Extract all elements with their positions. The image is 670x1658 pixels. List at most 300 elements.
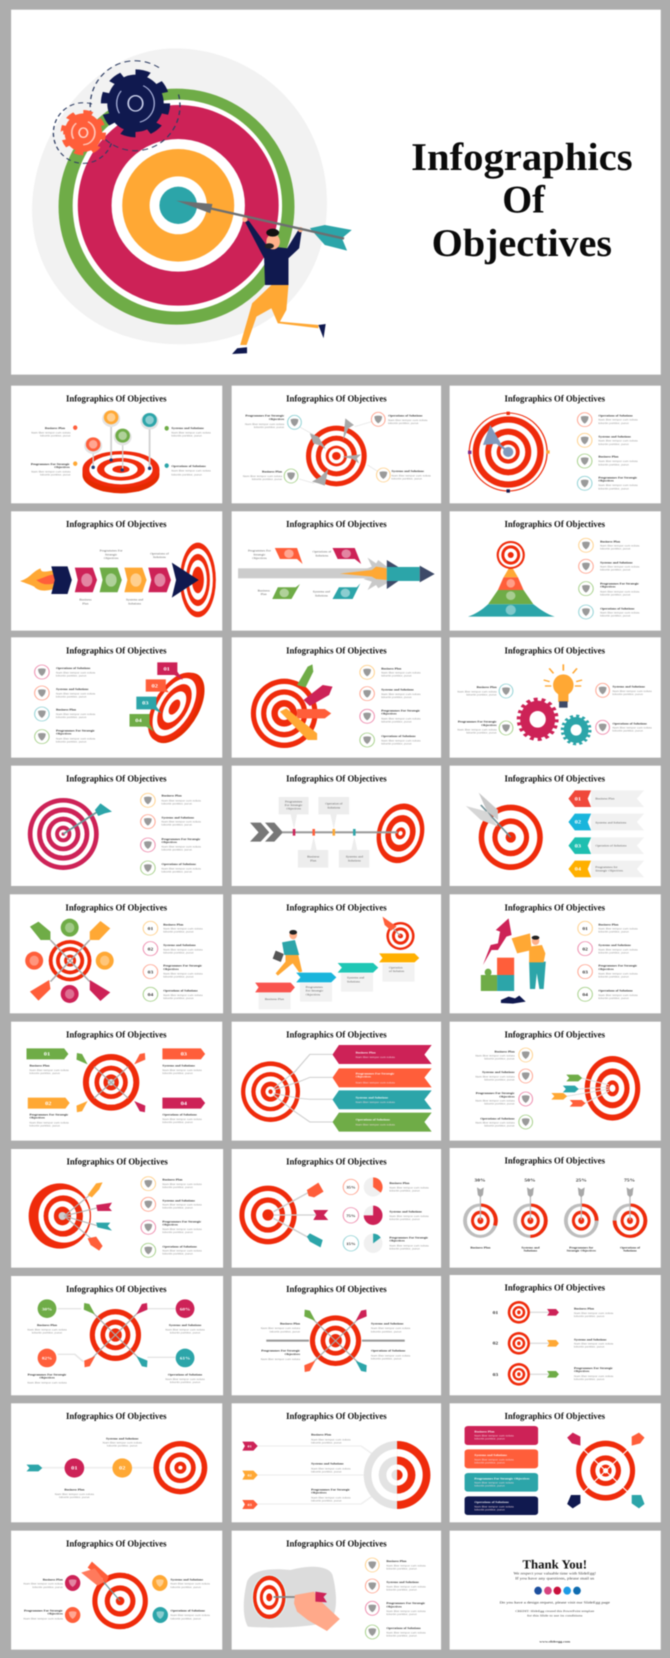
item: Operations: Nam liber tempor cum soluta [171,469,211,472]
item 04: lobortis porttitor, purus [598,997,629,1000]
arrow 02 [242,1462,350,1480]
item: Systems: lobortis porttitor, purus [484,1078,515,1081]
item: Systems: Systems and Solutions [598,435,631,438]
tag: Operations [312,548,361,564]
item: Operations [153,1607,210,1623]
icon: crimson gear [519,699,556,739]
tag: Programmes: Objectives [252,557,267,560]
step 1: Business Plan [265,998,284,1001]
box: Programmes: Nam liber tempor cum soluta [474,1481,514,1484]
ring and pie: 75%: Nam liber tempor cum soluta [389,1215,429,1218]
arrows [567,1433,645,1508]
ring and pie: 35%: lobortis porttitor, purus [389,1189,420,1192]
social icons [534,1587,581,1595]
item: Business [141,1177,202,1191]
item: Programmes: Programmes For Strategic [386,1602,425,1605]
stat: 60%: Nam liber tempor cum soluta [165,1328,205,1331]
panel: slide 8, target with bold arrows: Infographics Of Objectives [286,645,387,656]
thank you message: We respect your valuable time with SlideEgg! [514,1572,596,1576]
item: Systems [596,683,652,697]
gauge: 25%: Strategic Objectives [567,1249,596,1252]
item: Operations: Operations of Solutions [56,667,90,670]
figure: man with briefcase [273,930,302,976]
step 4: of Solution [389,970,404,973]
item: Business: Business Plan [43,1578,63,1581]
cover title [411,135,633,265]
panel: slide 6, pyramid with target: Infographics Of Objectives [505,519,605,529]
ribbon 04: Programmes for [595,866,618,869]
panel: slide 23, target with cross arrows: Infographics Of Objectives [286,1284,387,1294]
ring and pie: 75% [343,1206,429,1225]
item: Operations: Nam liber tempor cum soluta [56,671,95,674]
tag 04: Nam liber tempor cum soluta [162,1118,202,1121]
connectors [58,1309,175,1362]
ring and pie: 35% [343,1177,429,1197]
chevron labels: Objectives [104,557,118,560]
item: Systems [141,815,201,829]
ring and pie: 15%: Programmes For Strategic [389,1236,428,1239]
item: Systems [577,433,638,447]
item: Programmes: Nam liber tempor cum soluta [162,845,201,848]
path line [38,1465,175,1470]
panel: slide 20, target with pie charts [232,1149,441,1268]
item: Business: Nam liber tempor cum soluta [386,1564,426,1567]
item: Operations: Operations of Solutions [171,1609,205,1612]
panel: slide 22, target with percent circles: Infographics Of Objectives [66,1284,167,1294]
gauge: 50%: Systems and [521,1246,540,1249]
item: Systems [165,426,211,437]
item: Business: Business Plan [381,667,402,670]
item: Programmes: Objectives [598,479,614,482]
stat: 61%: Operations of Solutions [168,1373,202,1376]
item: Business: Nam liber tempor cum soluta [598,460,638,463]
callout: Business: Business [307,855,319,858]
panel: slide 16, target with corner tags: Infographics Of Objectives [66,1030,167,1040]
panel: slide 7, tilted target with flags: Infographics Of Objectives [66,645,167,656]
item: Programmes: Nam liber tempor cum soluta [162,1228,202,1231]
panel: slide 18, target with small arrows: Infographics Of Objectives [505,1030,605,1040]
item: Business: lobortis porttitor, purus [600,547,631,550]
flags: 04 [135,718,142,723]
item 04 [578,987,638,1001]
stat: 82%: Programmes For Strategic [28,1373,67,1376]
item 04: Nam liber tempor cum soluta [163,994,203,997]
tag 04: Operations of Solutions [162,1113,197,1116]
ring and pie: 15%: Objectives [389,1239,405,1242]
item: Business: Business Plan [598,455,619,458]
item: Programmes: Nam liber tempor cum soluta [600,590,639,593]
item: Operations: Nam liber tempor cum soluta [612,726,652,729]
panel: slide 6, pyramid with target [450,511,661,631]
tilted target [137,666,216,749]
item: Business [24,1575,80,1591]
item 03: lobortis porttitor, purus [163,975,194,978]
flame [20,568,56,591]
ribbon 04: Strategic Objectives [595,869,623,872]
target [252,1575,287,1620]
item: Operations: Operations of Solutions [171,465,206,468]
target [239,1186,297,1244]
thank you heading: Thank You! [522,1557,587,1571]
item 02: 02 [148,946,153,951]
ribbon 02: Systems and Solutions [595,821,626,824]
item: Programmes: Programmes For Strategic [56,729,95,732]
panel: slide 23, target with cross arrows [232,1276,441,1395]
panel: slide 28, target with orange dart [11,1531,222,1650]
callout: Business [298,837,328,868]
item: Operations: Operations of Solutions [162,863,196,866]
item: Programmes [24,1607,80,1623]
item: Programmes: Nam liber tempor cum soluta [475,1099,515,1102]
item: Operations: lobortis porttitor, purus [381,742,412,745]
panel: slide 13, target with four arrows and circles [10,894,223,1013]
target [90,1309,141,1361]
panel: slide 24, three small targets [450,1275,661,1395]
ring and pie: 35%: Nam liber tempor cum soluta [389,1186,429,1189]
arrow 02: 02 [247,1474,252,1478]
panel: slide 4, flaming chevron arrow: Infographics Of Objectives [66,519,167,529]
tag: Business: Business [258,589,270,592]
target [585,1056,640,1121]
target [310,1315,361,1366]
gauge: 75%: 75% [624,1177,635,1182]
arrow [176,201,352,251]
panel: slide 12, target with numbered ribbons [450,766,661,886]
box: Operations: Nam liber tempor cum soluta [474,1505,514,1508]
panel: slide 10, crimson target [11,766,222,886]
ring and pie: 15%: lobortis porttitor, purus [389,1247,420,1250]
item: Programmes [457,720,513,735]
item: Programmes: Objectives [600,585,615,588]
item: Business [35,707,95,721]
arrow 01: lobortis porttitor, purus [311,1441,342,1444]
tag: Systems [313,583,360,599]
item: Operations: lobortis porttitor, purus [171,473,202,476]
step 01: Business Plan [64,1488,85,1491]
item: Systems [360,687,421,701]
item 01: lobortis porttitor, purus [598,930,629,933]
contact text: for this Slide to use its conditions [527,1614,583,1617]
box: Programmes [465,1473,538,1492]
gauge: 75% [615,1177,645,1252]
item 04: Nam liber tempor cum soluta [598,994,638,997]
panel: slide 14, man climbing steps: Infographics Of Objectives [286,902,387,913]
item: Programmes: Objectives [386,1605,402,1608]
ring and pie: 35%: Business Plan [389,1182,410,1185]
item 04: Operations of Solutions [163,989,198,992]
item: Business: lobortis porttitor, purus [162,802,192,805]
item: Programmes: Programmes For Strategic [245,414,284,417]
item 01: Business Plan [163,923,184,926]
box: Systems [465,1449,538,1468]
item: Programmes [475,1092,533,1106]
chevron labels: Business [79,598,92,601]
ribbon: Business: Business Plan [356,1051,376,1054]
ribbon: Programmes [333,1068,432,1087]
target [468,412,550,493]
panel: slide 1, 3D target with pins [11,386,222,503]
item: Systems: lobortis porttitor, purus [162,823,192,826]
tag 02: Programmes For Strategic [29,1113,68,1116]
item: Programmes: lobortis porttitor, purus [466,731,497,734]
item 01: 01 [148,926,153,931]
row 03: lobortis porttitor, purus [574,1378,605,1381]
step 01: Nam liber tempor cum soluta [55,1493,94,1496]
callout: Programmes: For Strategic [285,804,303,807]
connectors [258,1446,389,1504]
stat: 30% [27,1299,67,1334]
gauge: 25%: 25% [576,1177,587,1182]
box: Operations [465,1496,538,1515]
ribbon: Operations: Operations of Solutions [356,1118,390,1121]
item: Operations: Operations of Solutions [598,414,633,417]
item 03: Objectives [598,968,614,971]
item: Systems: Systems and Solutions [386,1581,419,1584]
item: Business: Nam liber tempor cum soluta [56,713,95,716]
tag 03: 03 [181,1052,187,1057]
item 01 [143,921,203,935]
target [383,917,415,950]
ribbon: Operations: Nam liber tempor cum soluta [356,1123,395,1126]
item: Business: lobortis porttitor, purus [466,693,497,696]
item: Systems [377,468,431,482]
tag 04: 04 [181,1101,187,1106]
item: Business: Business Plan [162,1178,183,1181]
item: Business: Business Plan [56,708,76,711]
item: Programmes: Nam liber tempor cum soluta [386,1610,426,1613]
flags [130,662,183,732]
arrows [64,1182,112,1251]
item: Programmes: lobortis porttitor, purus [381,720,412,723]
item: Business: Business Plan [600,540,620,543]
tag 02: Objectives [29,1116,45,1119]
item: Business: Nam liber tempor cum soluta [457,690,497,693]
item: Systems: lobortis porttitor, purus [386,1588,417,1591]
chevron labels: Programmes For [100,549,123,552]
tag 01: 01 [44,1052,50,1057]
panel: slide 29, hand throwing dart: Infographics Of Objectives [286,1538,387,1549]
target [83,1054,139,1111]
item: Operations [579,605,639,619]
item: Programmes: Objectives [162,841,177,844]
tag: Programmes [248,548,303,564]
item: Operations: Operations of Solutions [600,607,634,610]
item: Programmes: Objectives [481,724,497,727]
step 3: Solutions [347,980,360,983]
item: Programmes: lobortis porttitor, purus [484,1102,515,1105]
callout: Operations: Operation of [325,802,343,805]
panel: slide 25, numbered path to target [11,1403,222,1522]
chevron labels: Strategic [105,553,117,556]
item 01: Business Plan [598,923,619,926]
row 03: 03 [493,1372,498,1377]
target [49,940,91,982]
arrow 01: Business Plan [311,1433,331,1436]
arrows [84,1303,147,1367]
gauge: 50% [515,1177,546,1252]
panel: slide 14, man climbing steps [232,894,441,1013]
box: Programmes: Programmes For Strategic Objectives [474,1477,529,1480]
arrow 01: 01 [247,1445,252,1449]
stat: 61%: 61% [180,1356,190,1361]
item: Programmes [360,709,421,723]
tag 01 [26,1048,69,1075]
item: Systems: Nam liber tempor cum soluta [162,820,201,823]
row 02: Systems and Solutions [574,1338,606,1341]
timeline [250,823,397,842]
stat: 82%: Nam liber tempor cum soluta [27,1381,67,1384]
arrow 02: Systems and Solutions [311,1462,344,1465]
target [92,1573,148,1629]
step 3 [338,963,378,992]
item: Programmes [141,1220,202,1234]
item 02: lobortis porttitor, purus [163,951,194,954]
stat: 30%: 30% [42,1307,52,1311]
item: Programmes: Objectives [381,712,397,715]
panel: slide 2, target with darts: Infographics Of Objectives [286,393,387,404]
item: Operations: lobortis porttitor, purus [162,870,192,873]
item: Systems: lobortis porttitor, purus [391,477,422,480]
item 03: Nam liber tempor cum soluta [163,972,203,975]
text: Systems: Systems and Solutions [371,1322,403,1325]
tag 04 [162,1098,205,1124]
item: Operations [475,1115,533,1129]
ring and pie: 15%: 15% [346,1242,356,1246]
item: Business [579,538,639,552]
item: Operations: lobortis porttitor, purus [162,1252,193,1255]
ribbon: Operations [333,1113,432,1132]
item: Operations: Nam liber tempor cum soluta [475,1121,515,1124]
item: Programmes: Programmes For Strategic [598,476,637,479]
target [241,1061,300,1122]
target [479,805,543,870]
item: Programmes: lobortis porttitor, purus [600,593,631,596]
item: Systems: Nam liber tempor cum soluta [381,693,421,696]
panel: slide 30, thank you [450,1531,661,1650]
panel: slide 26, half target: Infographics Of Objectives [286,1411,387,1421]
item: Business [141,793,201,807]
chevron labels: Solutions [153,556,166,559]
item: Business: Nam liber tempor cum soluta [600,544,639,547]
item: Systems: Systems and Solutions [381,688,414,691]
dart [81,1562,120,1601]
stat: 60%: lobortis porttitor, purus [170,1331,200,1334]
item: Business Plan: Nam liber tempor cum soluta [31,431,71,434]
text: Programmes: Objectives [285,1353,300,1356]
tag: Operations: Operations of [312,550,331,553]
row 03: Objectives [574,1370,589,1373]
item: Business [365,1558,426,1572]
panel: slide 26, half target [232,1403,441,1522]
step 3: Systems and [347,976,364,979]
stat: 82%: 82% [42,1356,52,1361]
step 01 [55,1458,94,1499]
item: Programmes [577,476,638,490]
step 02: Systems and Solutions [106,1437,138,1440]
arrow 03: Nam liber tempor cum soluta [311,1496,350,1499]
item: Business: lobortis porttitor, purus [162,1186,193,1189]
tag: Business: Plan [261,593,267,596]
panel: slide 10, crimson target: Infographics Of Objectives [66,774,167,784]
contact text: www.slideegg.com [539,1640,570,1643]
thank you message [514,1572,596,1581]
thank you message: If you have any questions, please mail us [515,1577,594,1581]
chevron labels: Solutions [128,602,141,605]
archer figure [232,217,326,354]
box: Operations: Operations of Solutions [474,1501,509,1504]
item: Programmes: Nam liber tempor cum soluta [24,1617,63,1620]
item 04: 04 [582,992,588,997]
tag 02: lobortis porttitor, purus [29,1124,60,1127]
figure: person with puzzle piece [512,933,546,989]
box: Business: Business Plan [474,1430,495,1433]
item: Programmes: Programmes For Strategic [162,838,201,841]
panel: slide 22, target with percent circles [11,1276,223,1395]
item: Programmes: Objectives [269,418,284,421]
hand and dart [274,1592,340,1631]
item: Operations: Nam liber tempor cum soluta [162,1249,202,1252]
pins [84,410,159,472]
item: Operations [596,720,652,734]
step 1 [255,983,295,1009]
item: Programmes [245,414,301,429]
box: Business: lobortis porttitor, purus [474,1437,505,1440]
item: Systems: Nam liber tempor cum soluta [162,1203,202,1206]
ring and pie: 15% [343,1234,429,1253]
item: Systems: Nam liber tempor cum soluta [171,431,211,434]
item: Business: Nam liber tempor cum soluta [162,799,201,802]
item: Programmes: Nam liber tempor cum soluta [598,484,638,487]
item: Business: lobortis porttitor, purus [252,478,282,481]
item: Operations: Nam liber tempor cum soluta [600,611,639,614]
contact text: Do you have a design request, please visit our SlideEgg page [500,1601,610,1604]
target [306,426,367,486]
item: Operations: Operations of Solutions [612,722,647,725]
callout: Systems [339,837,369,868]
arrow [63,803,112,834]
row 01: Nam liber tempor cum soluta [574,1312,613,1315]
item: Operations [577,413,638,427]
item: Operations: lobortis porttitor, purus [386,1634,417,1637]
puzzle blocks [481,958,526,1004]
item: Business [360,665,421,679]
flags: 03 [142,701,149,706]
callout: Programmes [279,797,309,829]
cover title: Objectives [432,221,612,265]
ring and pie: 35%: 35% [346,1186,356,1190]
item: Operations: Nam liber tempor cum soluta [386,1631,426,1634]
item: Programmes: Nam liber tempor cum soluta [381,717,421,720]
step 02 [103,1437,142,1478]
ribbon 02: 02 [575,820,581,825]
item 03: Nam liber tempor cum soluta [598,972,638,975]
tag 01: Nam liber tempor cum soluta [29,1069,69,1072]
item: Operations: lobortis porttitor, purus [598,422,629,425]
ring and pie: 75%: lobortis porttitor, purus [389,1218,420,1221]
stat: 60%: Systems and Solutions [169,1324,201,1327]
chevron labels: Systems and [126,598,143,601]
item: Business Plan: lobortis porttitor, purus [40,434,71,437]
target [576,1441,635,1501]
item 04: Operations of Solutions [598,989,633,992]
panel: slide 7, tilted target with flags [11,637,222,758]
panel: slide 5, teal rocket arrow: Infographics Of Objectives [286,519,387,529]
item: Business: lobortis porttitor, purus [484,1057,515,1060]
panel: slide 3, large target with list [450,386,661,503]
callout: Business: Plan [310,859,316,862]
step 4: Operation [389,966,403,969]
item: Business: lobortis porttitor, purus [381,674,412,677]
